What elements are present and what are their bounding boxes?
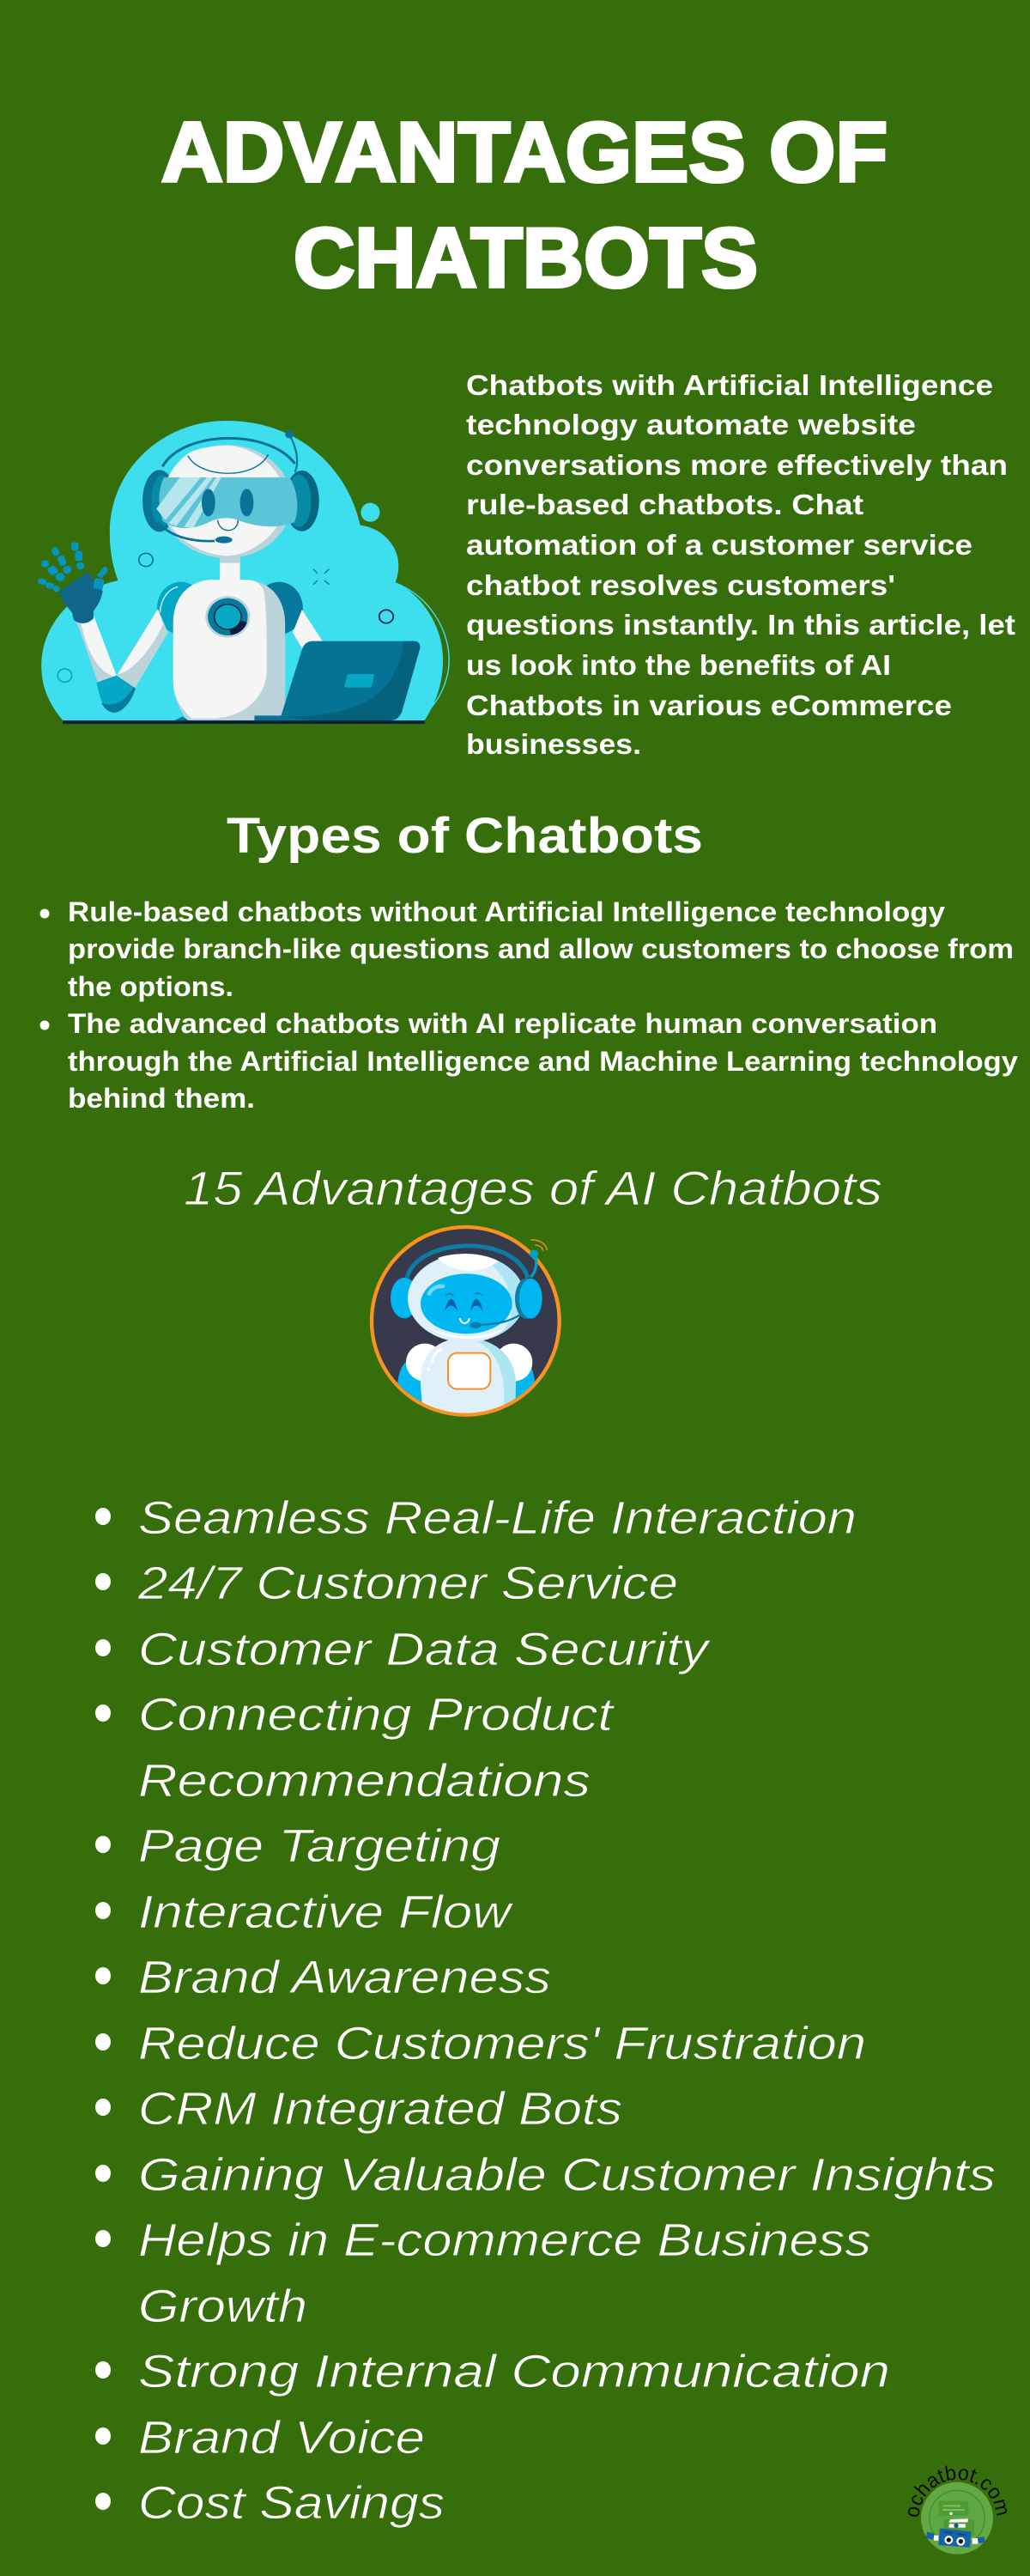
list: 15 advantages: Recommendations xyxy=(138,1755,591,1807)
list: types of chatbots: through the Artificial Intelligence and Machine Learning technology xyxy=(68,1046,1018,1077)
intro paragraph: conversations more effectively than xyxy=(466,450,1008,482)
list: 15 advantages: Brand Voice xyxy=(138,2412,425,2464)
list: 15 advantages: Customer Data Security xyxy=(138,1624,711,1675)
list: 15 advantages: Brand Awareness xyxy=(138,1952,551,2003)
list: types of chatbots: The advanced chatbots with AI replicate human conversation xyxy=(68,1008,937,1039)
list: 15 advantages: 24/7 Customer Service xyxy=(137,1558,678,1609)
heading: 15 advantages: 15 Advantages of AI Chatbots xyxy=(184,1161,882,1215)
logo: ochatbot.com xyxy=(908,2466,1008,2555)
list: 15 advantages: Reduce Customers' Frustration xyxy=(138,2018,866,2069)
list: 15 advantages: CRM Integrated Bots xyxy=(138,2083,622,2135)
list: 15 advantages xyxy=(95,1492,996,2529)
intro paragraph: chatbot resolves customers' xyxy=(466,570,895,602)
list: 15 advantages: Growth xyxy=(138,2281,307,2332)
list: types of chatbots: the options. xyxy=(68,971,233,1002)
intro paragraph: questions instantly. In this article, let xyxy=(466,610,1015,641)
list: 15 advantages: Helps in E-commerce Business xyxy=(138,2215,871,2266)
icon: robot avatar in circle xyxy=(372,1227,560,1419)
list: types of chatbots: Rule-based chatbots without Artificial Intelligence technology xyxy=(68,896,945,927)
list: 15 advantages: Gaining Valuable Customer Insights xyxy=(138,2149,996,2201)
intro paragraph: automation of a customer service xyxy=(466,530,972,562)
list: 15 advantages: Interactive Flow xyxy=(138,1886,513,1938)
heading: types of chatbots: Types of Chatbots xyxy=(227,808,703,864)
list: 15 advantages: Connecting Product xyxy=(138,1689,615,1741)
list: types of chatbots: provide branch-like questions and allow customers to choose from xyxy=(68,933,1014,964)
list: 15 advantages: Cost Savings xyxy=(138,2477,445,2529)
title: ADVANTAGES OF xyxy=(161,105,888,199)
intro paragraph: us look into the benefits of AI xyxy=(466,650,891,682)
icon: waving robot with laptop xyxy=(37,421,449,724)
intro paragraph: Chatbots in various eCommerce xyxy=(466,690,952,722)
list: 15 advantages: Strong Internal Communication xyxy=(138,2346,890,2397)
intro paragraph xyxy=(466,370,1015,761)
intro paragraph: Chatbots with Artificial Intelligence xyxy=(466,370,993,402)
title xyxy=(161,105,888,305)
list: 15 advantages: Page Targeting xyxy=(138,1820,500,1872)
list: types of chatbots xyxy=(39,896,1018,1114)
logo: ochatbot.com: ochatbot.com xyxy=(908,2466,1008,2517)
list: 15 advantages: Seamless Real-Life Interaction xyxy=(138,1492,857,1544)
list: types of chatbots: behind them. xyxy=(68,1083,255,1114)
intro paragraph: technology automate website xyxy=(466,410,916,441)
intro paragraph: rule-based chatbots. Chat xyxy=(466,489,863,521)
title: CHATBOTS xyxy=(294,210,758,305)
intro paragraph: businesses. xyxy=(466,729,641,761)
